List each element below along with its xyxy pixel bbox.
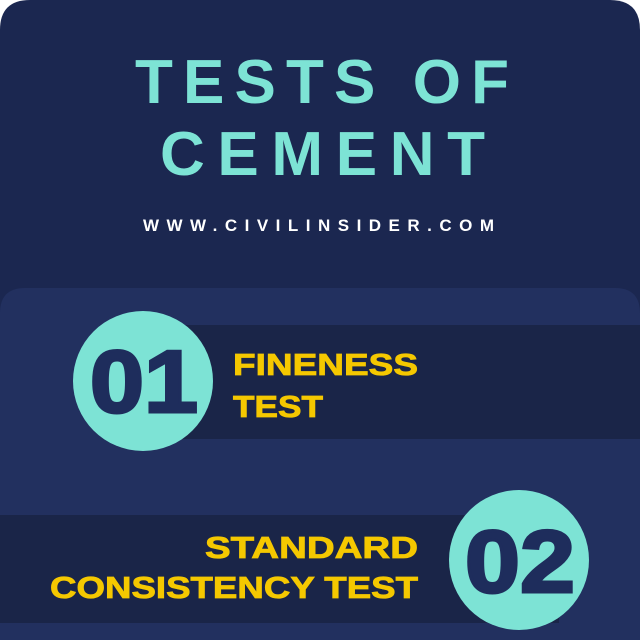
icon: number circle 02: 02 xyxy=(465,512,575,611)
icon: number circle 01 xyxy=(73,311,213,451)
label 1: TEST xyxy=(233,389,323,424)
icon: number circle 02 xyxy=(449,490,589,630)
label 2: STANDARD xyxy=(205,530,418,565)
label 1: FINENESS xyxy=(233,347,418,382)
title: TESTS OF xyxy=(135,48,509,117)
label 2: CONSISTENCY TEST xyxy=(50,570,418,605)
item 2: standard consistency test xyxy=(0,490,589,630)
title: CEMENT xyxy=(160,120,485,189)
label 1 xyxy=(233,347,418,424)
panel: tests list xyxy=(0,288,640,640)
website url: WWW.CIVILINSIDER.COM xyxy=(143,216,494,235)
title xyxy=(135,48,509,189)
item 1: fineness test xyxy=(73,311,640,451)
icon: number circle 01: 01 xyxy=(90,332,198,431)
label 2 xyxy=(50,530,418,605)
